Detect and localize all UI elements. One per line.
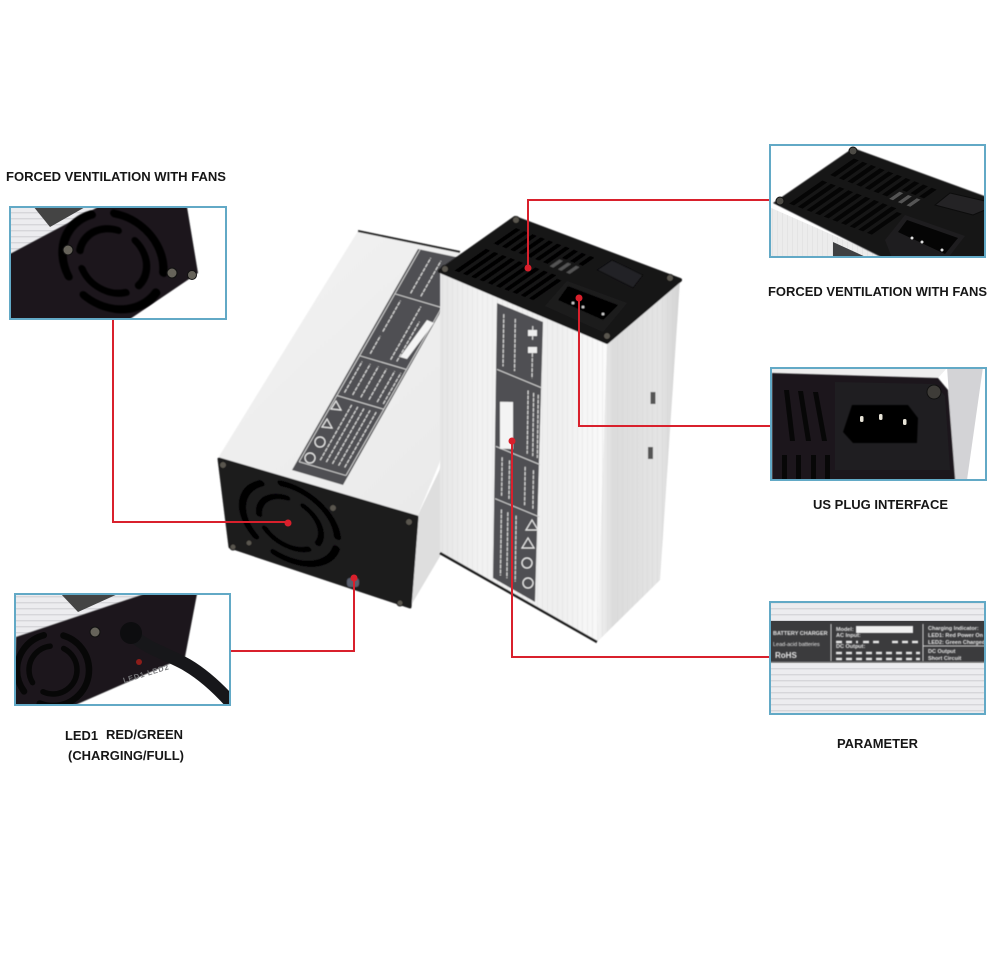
- right charger front face: [440, 270, 607, 642]
- caption: LED states: LED1: [65, 729, 98, 743]
- panel: parameter label close-up: Model:: [836, 627, 854, 633]
- caption: plug interface: US PLUG INTERFACE: [813, 498, 948, 512]
- connector: socket to right panel: [576, 294, 771, 426]
- panel: parameter label close-up: Charging Indicator:: [928, 626, 979, 632]
- panel: fan close-up: [9, 186, 227, 336]
- socket: [843, 405, 918, 443]
- left charger fan end plate: [219, 457, 417, 607]
- power cable: [133, 635, 234, 706]
- caption: parameter: PARAMETER: [837, 737, 918, 751]
- caption: LED states: [65, 728, 184, 763]
- product photo: left charger: [218, 231, 520, 607]
- left charger side face: [410, 465, 442, 607]
- LED indicator: [136, 659, 142, 665]
- panel: parameter label close-up: DC Output: [928, 649, 956, 655]
- product photo: right charger: [440, 216, 680, 642]
- panel: LED close-up: LED1 LED2: [122, 663, 170, 685]
- panel: parameter label close-up: AC Input:: [836, 633, 861, 639]
- power switch: [597, 260, 643, 288]
- IEC socket: [558, 286, 618, 320]
- left charger label: [292, 249, 470, 485]
- panel: parameter label close-up: DC Output:: [836, 644, 865, 650]
- connector: label to parameter panel: [508, 438, 770, 657]
- panel: LED close-up: [14, 593, 234, 706]
- panel: parameter label close-up: [769, 601, 986, 714]
- right charger top panel with vents, switch and socket: [440, 216, 680, 342]
- socket plate: [545, 281, 627, 332]
- panel: parameter label close-up: LED1: Red Power On: [928, 633, 984, 639]
- panel: top vents close-up: [769, 144, 990, 258]
- caption: LED states: (CHARGING/FULL): [68, 749, 184, 763]
- panel: plug socket close-up: [770, 367, 987, 480]
- left charger back edge: [358, 231, 460, 252]
- panel: parameter label close-up: BATTERY CHARGER: [773, 631, 828, 637]
- left charger top face: [218, 231, 520, 517]
- right charger label: [493, 303, 543, 602]
- left charger fan slots: [223, 457, 357, 589]
- connector: fan to left panel: [113, 320, 292, 526]
- caption: forced ventilation, right: FORCED VENTILATION WITH FANS: [768, 285, 987, 299]
- connector: top vents to right panel: [524, 200, 770, 272]
- panel: parameter label close-up: RoHS: [775, 651, 797, 660]
- panel: parameter label close-up: Short Circuit: [928, 656, 961, 662]
- caption: LED states: RED/GREEN: [106, 728, 183, 742]
- panel: parameter label close-up: Lead-acid batteries: [773, 642, 820, 648]
- panel: parameter label close-up: LED2: Green Charged: [928, 640, 985, 646]
- heading: forced ventilation, left: FORCED VENTILATION WITH FANS: [6, 170, 226, 184]
- right charger right face: [597, 280, 680, 642]
- connector: LED to left panel: [231, 574, 358, 651]
